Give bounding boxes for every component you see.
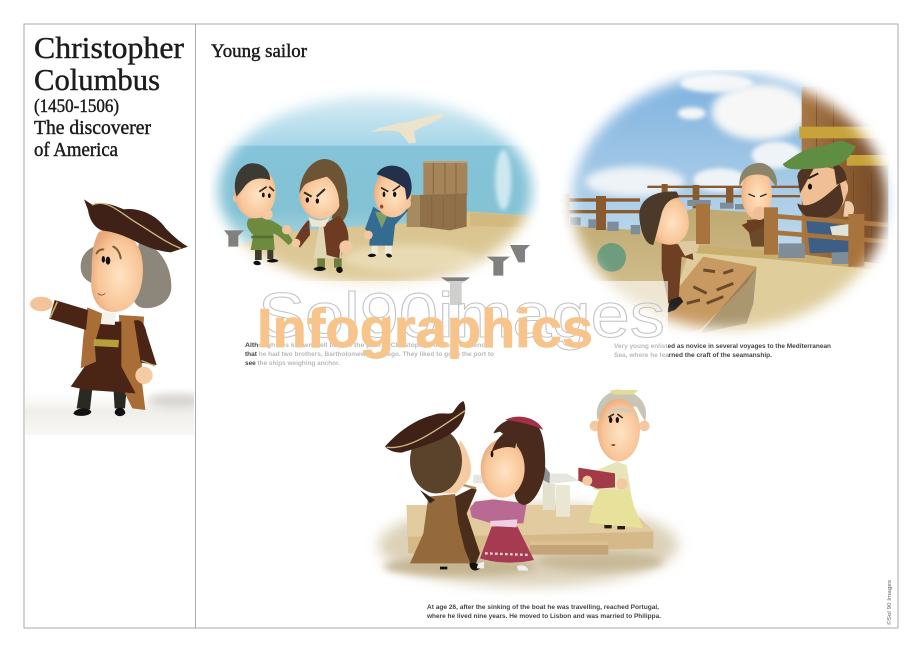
figure: Columbus pointing: [25, 199, 207, 435]
caption: Portugal: [426, 604, 661, 620]
sea: [210, 146, 540, 252]
sky and clouds: [560, 70, 900, 243]
title block: The discoverer: [34, 118, 152, 139]
boy in blue: [364, 166, 412, 257]
caption: childhood: [245, 342, 494, 367]
watermark: Infographics: [257, 297, 593, 359]
wooden platform: [407, 505, 653, 555]
priest with book: [578, 389, 650, 529]
deck bollards: [570, 200, 848, 264]
young Columbus in brown coat: [292, 159, 353, 273]
credit: ©Sol 90 Images: [886, 580, 893, 625]
section heading: Young sailor: [211, 42, 307, 62]
title block: of America: [34, 140, 118, 161]
title block: (1450-1506): [34, 96, 119, 117]
caption: Portugal: where he lived nine years. He moved to Lisbon and was married to Philippa.: [426, 613, 661, 620]
mast: [799, 87, 893, 273]
stone bench: [473, 473, 579, 517]
young Columbus from behind: [639, 191, 700, 313]
seagull: [371, 114, 446, 144]
title block: Columbus: [34, 62, 160, 97]
Philippa the bride: [470, 417, 550, 571]
caption: childhood: that he had two brothers, Bartholomew and Diego. They liked to go to the port to: [245, 351, 494, 358]
caption: childhood: Although it is known well little of the past of Christopher, there is evidence: [245, 342, 490, 349]
watermark: [257, 281, 668, 371]
ship deck: [566, 208, 832, 322]
title block: [34, 30, 185, 161]
caption: childhood: see the ships weighing anchor.: [245, 360, 340, 367]
near fence: [696, 204, 888, 267]
older sailor: [739, 163, 777, 247]
Columbus groom from behind: [385, 401, 480, 570]
caption: novice voyages: [614, 343, 831, 359]
far fences: [560, 184, 801, 230]
caption: Portugal: At age 26, after the sinking of the boat he was travelling, reached Portugal,: [427, 604, 659, 611]
wooden crates: [407, 161, 467, 230]
scene: marriage to Philippa: [378, 389, 678, 587]
caption: novice voyages: Very young enlisted as novice in several voyages to the Mediterranean: [614, 343, 831, 350]
green bundle: [597, 243, 626, 272]
watermark: Sol90images: [258, 281, 665, 351]
title block: Christopher: [34, 30, 185, 65]
boy in green: [233, 163, 293, 265]
bollards: [224, 230, 530, 305]
quay sand: [238, 212, 534, 290]
sky: [227, 91, 523, 146]
scene: novice on the ship: [560, 70, 900, 343]
sandy ground: [378, 503, 678, 587]
cargo hatch ramp: [667, 256, 757, 333]
caption: novice voyages: Sea, where he learned the craft of the seamanship.: [614, 352, 772, 359]
bearded captain in green hat: [783, 141, 856, 253]
scene: boys at the port: [210, 85, 543, 305]
